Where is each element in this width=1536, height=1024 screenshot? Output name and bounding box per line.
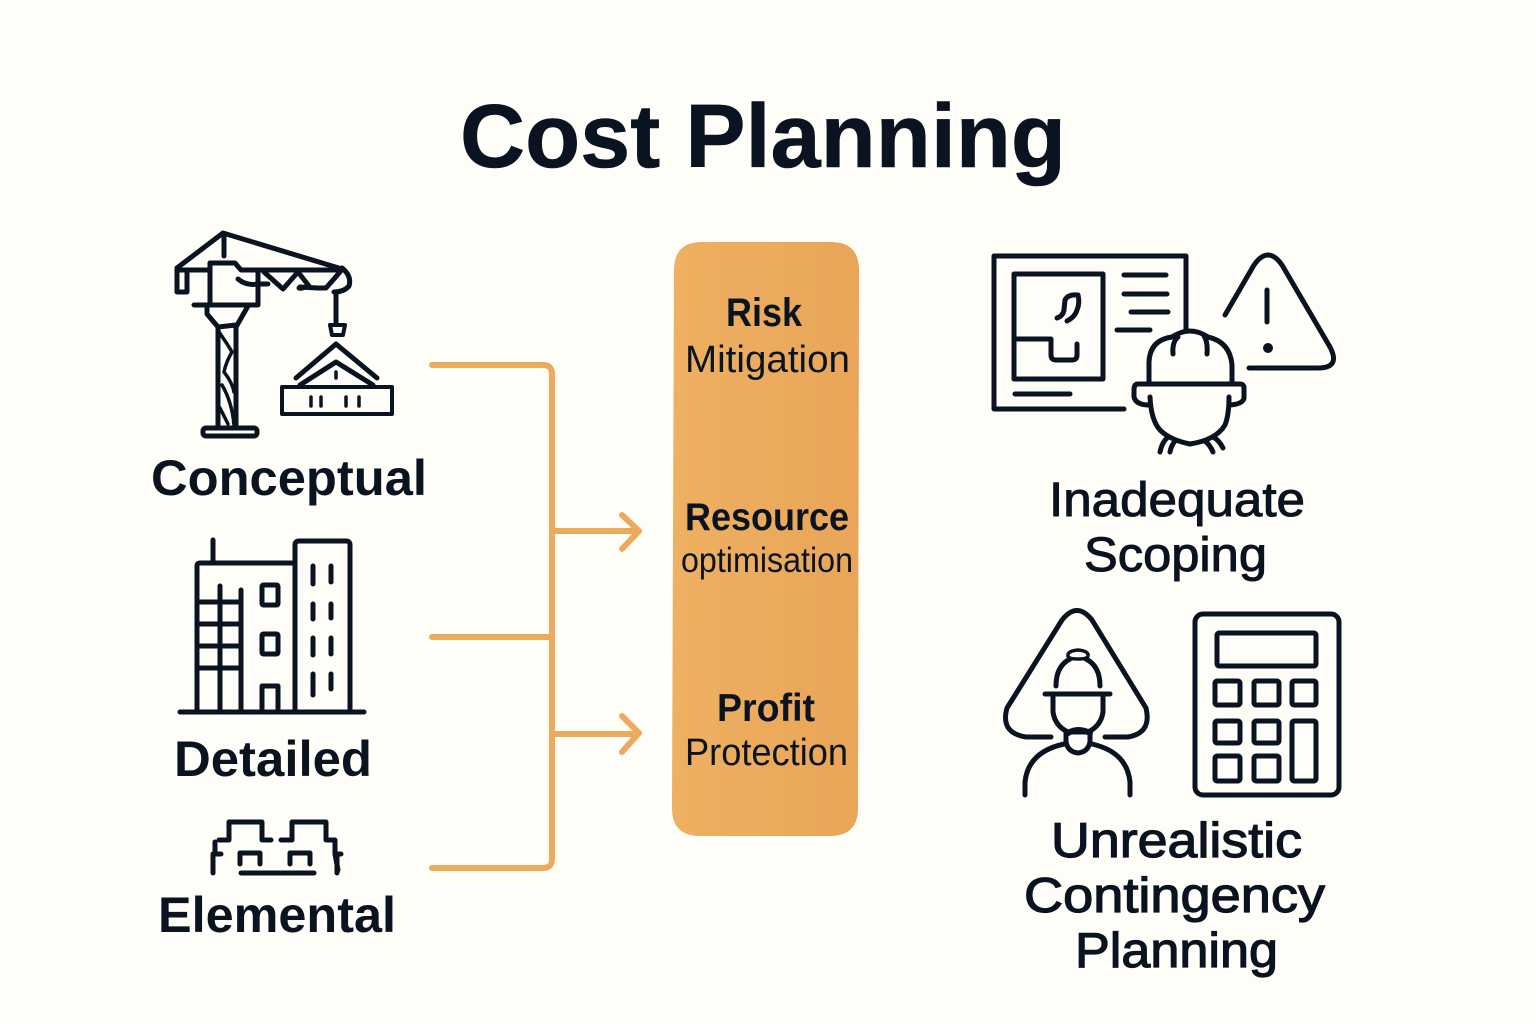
label: Unrealistic Contingency Planning: Contingency: [1024, 869, 1326, 923]
title: Cost Planning: [460, 87, 1066, 187]
Profit Protection: [685, 687, 848, 774]
icon: office buildings: [180, 540, 364, 712]
Profit Protection: Protection: [685, 732, 848, 774]
label: Inadequate Scoping: Scoping: [1084, 529, 1267, 582]
label: Unrealistic Contingency Planning: Planning: [1075, 924, 1278, 978]
Profit Protection: Profit: [717, 687, 815, 730]
connector: bracket with arrows: [432, 365, 639, 868]
panel: outcomes: [672, 242, 859, 836]
Risk Mitigation: Risk: [726, 291, 803, 335]
Risk Mitigation: [685, 291, 850, 381]
Resource optimisation: [681, 496, 853, 580]
Resource optimisation: Resource: [685, 496, 849, 539]
label: Inadequate Scoping: Inadequate: [1049, 474, 1305, 527]
label: Unrealistic Contingency Planning: Unrealistic: [1051, 814, 1302, 868]
icon: tower crane lifting a house: [177, 233, 392, 436]
Risk Mitigation: Mitigation: [685, 339, 850, 381]
label: Conceptual: Conceptual: [151, 450, 427, 506]
label: Elemental: Elemental: [158, 887, 396, 943]
icon: building elements: [213, 822, 341, 873]
label: Unrealistic Contingency Planning: [1024, 814, 1326, 978]
icon: plan document, warning sign and hard-hat worker: [994, 255, 1334, 452]
label: Detailed: Detailed: [174, 731, 372, 787]
label: Inadequate Scoping: [1049, 474, 1305, 582]
Resource optimisation: optimisation: [681, 541, 853, 580]
icon: worker in warning triangle: [1006, 610, 1147, 795]
icon: calculator: [1195, 614, 1339, 795]
